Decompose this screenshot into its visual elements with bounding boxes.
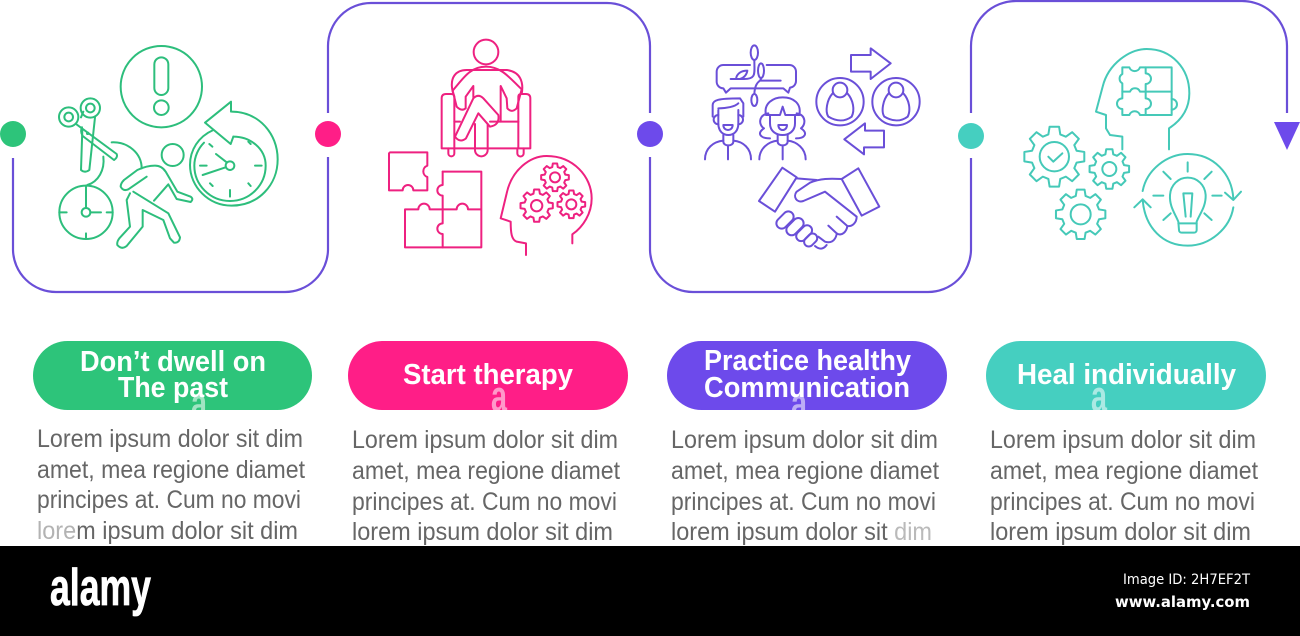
body text: amet, mea regione diamet: [671, 457, 939, 485]
pill heading: The past: [118, 372, 228, 404]
body text: principes at. Cum no movi: [37, 486, 301, 514]
pill heading: a: [791, 379, 807, 428]
step 1: [0, 46, 312, 545]
body text: [37, 425, 305, 545]
body text: Lorem ipsum dolor sit dim: [671, 426, 938, 454]
icon: running away from past: [59, 46, 278, 248]
body text: amet, mea regione diamet: [990, 457, 1258, 485]
pill heading: Communication: [704, 372, 910, 404]
step 4: [958, 49, 1266, 546]
body text: lorem ipsum dolor sit dim: [352, 518, 613, 546]
icon: communication: [705, 45, 920, 249]
icon: therapy: [389, 40, 592, 255]
logo: alamy: [50, 559, 151, 617]
pill heading: a: [1091, 372, 1107, 421]
body text: principes at. Cum no movi: [671, 488, 936, 516]
body text: [990, 426, 1258, 546]
step 3: [637, 45, 947, 546]
pill heading: [33, 341, 312, 428]
footer bar: [0, 546, 1300, 636]
website: www.alamy.com: [1115, 593, 1250, 611]
dot: [315, 121, 341, 147]
body text: amet, mea regione diamet: [37, 456, 305, 484]
dot: [958, 123, 984, 149]
body text: principes at. Cum no movi: [990, 488, 1255, 516]
pill heading: a: [491, 372, 507, 421]
pill heading: Heal individually: [1017, 359, 1236, 391]
body text: lorem ipsum dolor sit dim: [671, 518, 932, 546]
pill heading: [986, 341, 1266, 421]
body text: lorem ipsum dolor sit dim: [37, 517, 298, 545]
body text: amet, mea regione diamet: [352, 457, 620, 485]
arrowhead: [1274, 122, 1300, 150]
body text: [671, 426, 939, 546]
pill heading: a: [191, 379, 207, 428]
pill heading: [348, 341, 628, 421]
body text: lorem ipsum dolor sit dim: [990, 518, 1251, 546]
body text: [352, 426, 620, 546]
pill heading: [667, 341, 947, 428]
body text: Lorem ipsum dolor sit dim: [37, 425, 303, 453]
dot: [0, 121, 26, 147]
pill heading: Don’t dwell on: [80, 346, 266, 378]
body text: Lorem ipsum dolor sit dim: [990, 426, 1256, 454]
pill heading: Practice healthy: [704, 345, 911, 377]
dot: [637, 121, 663, 147]
image id: Image ID: 2H7EF2T: [1123, 572, 1250, 588]
body text: principes at. Cum no movi: [352, 488, 617, 516]
timeline path: [13, 1, 1287, 292]
icon: healing: [1024, 49, 1241, 246]
body text: Lorem ipsum dolor sit dim: [352, 426, 618, 454]
pill heading: Start therapy: [403, 359, 573, 391]
step 2: [315, 40, 628, 546]
